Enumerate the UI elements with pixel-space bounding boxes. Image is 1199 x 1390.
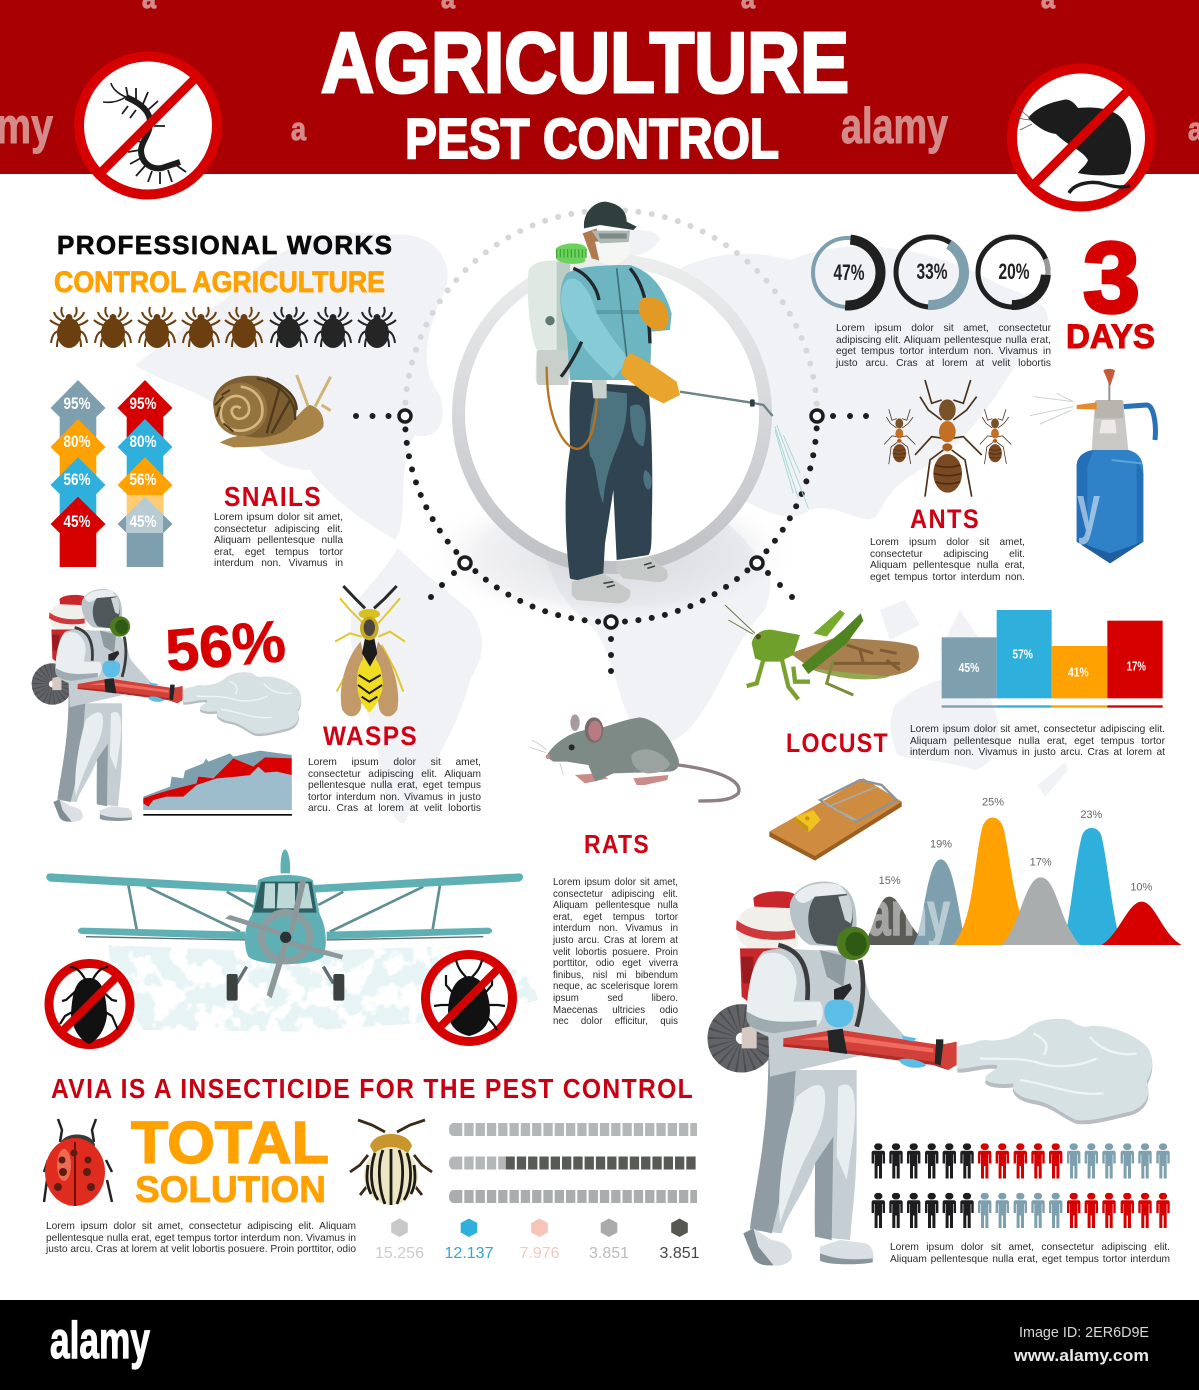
text: ants paragraph <box>870 537 1025 583</box>
donut 33%: 33% <box>916 259 948 284</box>
text: rats paragraph: neque, ac scelerisque lorem <box>553 981 678 992</box>
heading: ants: ANTS <box>910 504 980 534</box>
dotted orbit with nodes <box>353 210 869 674</box>
text: ants paragraph: Lorem ipsum dolor sit amet, <box>870 537 1025 548</box>
big number 56%: 56% <box>163 608 288 684</box>
area chart <box>143 751 292 816</box>
heading: wasps: WASPS <box>323 721 418 751</box>
heading: total: TOTAL <box>131 1110 329 1176</box>
text: snails paragraph <box>214 512 344 569</box>
central worker with backpack sprayer <box>528 202 808 603</box>
legend hexagons and values <box>375 1218 700 1262</box>
icon row: ticks <box>50 307 396 348</box>
text: rats paragraph: erat, eget tempus tortor <box>553 912 678 923</box>
text: wasps paragraph <box>308 757 481 814</box>
text: ants paragraph: Aliquam pellentesque nulla erat, <box>870 560 1025 571</box>
text: ants paragraph: consectetur adipiscing elit. <box>870 549 1025 560</box>
peak chart: 19% <box>930 839 952 851</box>
illustration: crop duster biplane <box>46 849 538 1032</box>
heading: solution: SOLUTION <box>135 1169 326 1210</box>
central ring <box>458 260 766 568</box>
text: rats paragraph: ipsum sed libero. <box>553 993 678 1004</box>
black footer band <box>0 1300 1199 1390</box>
bar chart: 41% <box>1068 666 1089 680</box>
header watermarks: a <box>291 111 306 147</box>
text: snails paragraph: interdum non. Vivamus in <box>214 558 343 569</box>
illustration: spray bottle <box>1030 369 1155 563</box>
footer logo: alamy <box>50 1312 150 1370</box>
text: people chart paragraph: Lorem ipsum dolor sit amet, consectetur adipiscing elit. <box>890 1242 1170 1253</box>
heading: locust: LOCUST <box>786 728 889 758</box>
text: snails paragraph: Lorem ipsum dolor sit amet, <box>214 512 343 523</box>
donut 20%: 20% <box>998 259 1030 284</box>
bar chart: 17% <box>1127 659 1146 673</box>
arrow chart column 2 <box>118 380 172 567</box>
text: days paragraph: Lorem ipsum dolor sit amet, consectetur <box>836 323 1051 334</box>
icon: no centipede sign <box>79 56 217 194</box>
arrow chart column 2: 56% <box>130 470 156 489</box>
illustration: wasp <box>335 586 405 716</box>
text: wasps paragraph: consectetur adipiscing elit. Aliquam <box>308 769 481 780</box>
text: rats paragraph <box>552 877 678 1027</box>
heading: snails: SNAILS <box>224 481 322 512</box>
icon: no bug sign left <box>49 964 130 1044</box>
text: rats paragraph: consectetur adipiscing elit. <box>553 889 678 900</box>
peak chart: 25% <box>982 796 1004 808</box>
segmented bar 1 <box>449 1123 697 1136</box>
arrow chart column 2: 45% <box>130 512 156 531</box>
text: locust paragraph <box>910 724 1165 758</box>
text: days paragraph: adipiscing elit. Aliquam pellentesque nulla erat, <box>836 335 1051 346</box>
large hazmat sprayer <box>722 881 1152 1266</box>
text: locust paragraph: interdum non. Vivamus in justo arcu. Cras at lorem at <box>910 747 1165 758</box>
label: days: DAYS <box>1066 318 1155 356</box>
arrow chart column 1: 95% <box>64 394 90 413</box>
bar chart: 45% <box>959 661 979 675</box>
world map background <box>135 230 1068 823</box>
illustration: colorado beetle <box>350 1120 432 1205</box>
donut 20% <box>967 226 1059 318</box>
text: rats paragraph: Maecenas ultricies odio <box>553 1005 678 1016</box>
peak chart: 17% <box>1030 857 1052 869</box>
text: wasps paragraph: arcu. Cras at lorem at velit lobortis <box>308 803 481 814</box>
text: rats paragraph: finibus, nisl mi bibendum <box>553 970 678 981</box>
text: locust paragraph: Lorem ipsum dolor sit amet, consectetur adipiscing elit. <box>910 724 1165 735</box>
heading: professional works: PROFESSIONAL WORKS <box>57 230 392 260</box>
arrow chart column 1: 45% <box>64 512 90 531</box>
donut 47% <box>812 237 883 308</box>
text: rats paragraph: porttitor, odio eget viverra <box>553 958 678 969</box>
text: rats paragraph: velit lobortis posuere. Proin <box>553 947 678 958</box>
arrow chart column 2: 80% <box>130 432 156 451</box>
text: total solution paragraph: Lorem ipsum dolor sit amet, consectetur adipiscing elit. Aliquam <box>46 1221 356 1232</box>
legend hexagons and values: 3.851 <box>589 1245 629 1262</box>
central ring shadow <box>421 483 801 627</box>
illustration: ladybug <box>44 1119 112 1206</box>
donut 33% <box>885 226 977 318</box>
text: total solution paragraph: justo arcu. Cras at lorem at velit lobortis posuere. Proin porttitor, odio <box>46 1244 356 1255</box>
illustration: rat <box>530 714 739 801</box>
icon: no bug sign right <box>426 954 512 1042</box>
illustration: snail <box>209 370 331 447</box>
footer url: www.alamy.com <box>1013 1346 1149 1365</box>
illustration: locust <box>725 605 919 699</box>
footer image id: Image ID: 2ER6D9E <box>1019 1324 1149 1341</box>
segmented bar 3 <box>449 1190 697 1203</box>
text: wasps paragraph: Lorem ipsum dolor sit amet, <box>308 757 481 768</box>
illustration: mousetrap <box>769 778 902 861</box>
illustration: ants <box>884 380 1011 497</box>
text: days paragraph: eget tempus tortor interdum non. Vivamus in <box>836 346 1051 357</box>
text: wasps paragraph: pellentesque nulla erat, eget tempus <box>308 780 481 791</box>
small hazmat sprayer <box>40 589 301 822</box>
text: days paragraph <box>836 323 1051 369</box>
text: snails paragraph: erat, eget tempus tortor <box>214 547 343 558</box>
peak chart: 23% <box>1080 809 1103 821</box>
big number 3: 3 <box>1083 222 1140 334</box>
header watermarks: alamy <box>841 98 948 154</box>
header watermarks <box>0 0 1199 154</box>
peak chart: 10% <box>1130 881 1153 893</box>
text: snails paragraph: consectetur adipiscing elit. <box>214 524 343 535</box>
bar chart <box>942 610 1163 708</box>
text: snails paragraph: Aliquam pellentesque nulla <box>214 535 343 546</box>
text: rats paragraph: justo arcu. Cras at lorem at <box>553 935 678 946</box>
people pictogram row 1 <box>872 1143 1170 1178</box>
legend hexagons and values: 12.137 <box>444 1245 494 1262</box>
bar chart: 57% <box>1012 648 1033 662</box>
icon: no rat sign <box>1012 68 1150 206</box>
text: days paragraph: justo arcu. Cras at lorem at velit lobortis <box>836 358 1051 369</box>
text: rats paragraph: Aliquam pellentesque nulla <box>553 900 678 911</box>
peak chart: 15% <box>879 875 901 887</box>
arrow chart column 2: 95% <box>130 394 156 413</box>
legend hexagons and values: 15.256 <box>375 1245 424 1262</box>
heading: avia insecticide: AVIA IS A INSECTICIDE FOR THE PEST CONTROL <box>51 1073 694 1104</box>
text: people chart paragraph <box>890 1242 1170 1265</box>
legend hexagons and values: 3.851 <box>660 1245 700 1262</box>
illustration: spray bottle: y <box>1077 471 1100 545</box>
subtitle: PEST CONTROL <box>405 107 779 171</box>
peak chart <box>863 796 1182 945</box>
watermark over peak chart: amy <box>868 880 950 949</box>
title: AGRICULTURE <box>321 16 849 111</box>
arrow chart column 1: 80% <box>64 432 90 451</box>
people pictogram row 2 <box>872 1193 1170 1228</box>
arrow chart column 1 <box>50 380 106 567</box>
heading: control agriculture: CONTROL AGRICULTURE <box>54 266 385 299</box>
text: rats paragraph: interdum non. Vivamus in <box>553 923 678 934</box>
donut 47%: 47% <box>834 260 864 285</box>
text: rats paragraph: Lorem ipsum dolor sit amet, <box>553 877 678 888</box>
arrow chart column 1: 56% <box>64 470 90 489</box>
text: ants paragraph: eget tempus tortor interdum non. <box>870 572 1025 583</box>
text: wasps paragraph: tortor interdum non. Vivamus in justo <box>308 792 481 803</box>
red header band <box>0 0 1199 174</box>
heading: rats: RATS <box>584 829 650 859</box>
segmented bar 2 <box>449 1156 697 1170</box>
text: rats paragraph: nec dolor efficitur, quis <box>553 1016 678 1027</box>
text: total solution paragraph <box>46 1221 356 1255</box>
text: locust paragraph: Aliquam pellentesque nulla erat, eget tempus tortor <box>910 736 1165 747</box>
text: total solution paragraph: pellentesque nulla erat, eget tempus tortor interdum non. Vivamus in <box>46 1233 356 1244</box>
text: people chart paragraph: Aliquam pellentesque nulla erat, eget tempus tortor interdum <box>890 1254 1170 1265</box>
legend hexagons and values: 7.976 <box>520 1245 560 1262</box>
